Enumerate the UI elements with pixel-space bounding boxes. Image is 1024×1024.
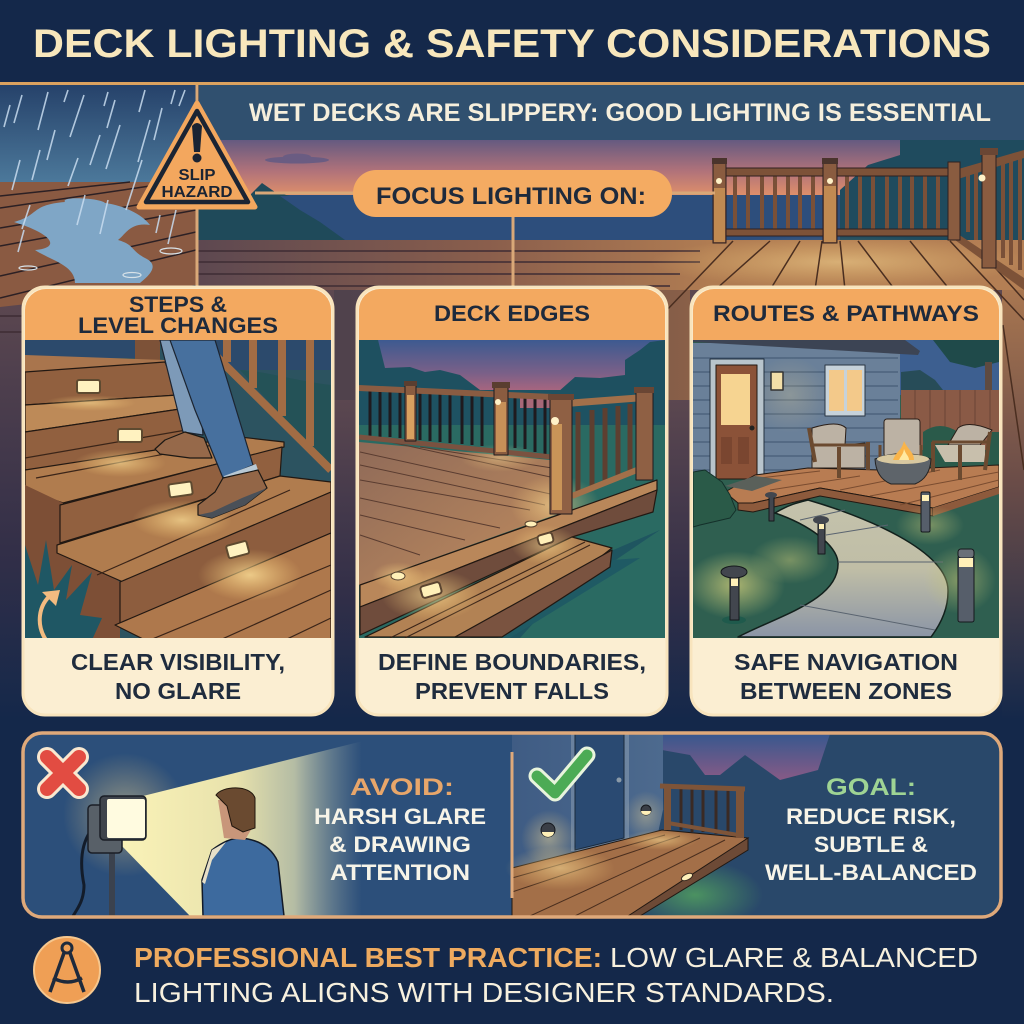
caption: routes [734,649,958,704]
panel: avoid and goal comparison [23,733,1001,930]
icon: slip hazard warning sign [139,103,255,207]
illustration: floodlight glare and person [68,743,356,916]
icon: green check [537,755,587,793]
connector lines [197,85,715,290]
title band [0,0,1024,85]
text: goal: GOAL: [826,774,916,801]
panel header: deck edges [359,289,665,340]
caption: deck edges: PREVENT FALLS [415,678,609,704]
text: professional best practice: LOW GLARE & BALANCED [610,942,978,973]
text: avoid: & DRAWING [329,832,471,857]
text: goal: WELL-BALANCED [765,860,977,885]
panel: steps and level changes [23,287,333,715]
caption: steps: NO GLARE [115,678,241,704]
icon: slip hazard warning sign: SLIP [178,167,216,184]
subtitle banner: WET DECKS ARE SLIPPERY: GOOD LIGHTING IS ESSENTIAL [249,99,991,127]
rain scene with wet deck [0,85,196,307]
panel header: routes [693,289,999,340]
panel header: steps [25,289,331,340]
illustration: lit stairs with walking person [25,340,331,640]
text: avoid: ATTENTION [330,860,470,885]
panel: routes and pathways [685,287,1001,715]
text: avoid [314,774,486,885]
text: professional best practice: LIGHTING ALIGNS WITH DESIGNER STANDARDS. [134,977,834,1008]
caption: steps [71,649,285,704]
background deck scene [0,140,1024,720]
text: avoid: AVOID: [350,774,454,801]
illustration: deck edge with railing [359,340,665,638]
panel header: deck edges: DECK EDGES [434,301,590,326]
text: goal [765,774,977,885]
callout: focus lighting on: FOCUS LIGHTING ON: [376,183,646,210]
panel header: routes: ROUTES & PATHWAYS [713,301,979,326]
panel header: steps: LEVEL CHANGES [78,313,278,338]
text: goal: SUBTLE & [814,832,928,857]
title band: DECK LIGHTING & SAFETY CONSIDERATIONS [33,22,991,66]
caption: steps: CLEAR VISIBILITY, [71,649,285,675]
caption: deck edges: DEFINE BOUNDARIES, [378,649,646,675]
text: goal: REDUCE RISK, [786,804,956,829]
icon: drafting compass badge [34,937,100,1003]
text: professional best practice: PROFESSIONAL BEST PRACTICE: [134,942,602,973]
panel: deck edges [357,287,667,715]
icon: red cross [47,757,79,789]
callout: focus lighting on [353,170,672,217]
panel header: steps: STEPS & [129,292,227,317]
caption: deck edges [378,649,646,704]
caption: routes: BETWEEN ZONES [740,678,952,704]
text: avoid: HARSH GLARE [314,804,486,829]
icon: slip hazard warning sign: HAZARD [162,184,232,201]
subtitle banner [199,85,1024,140]
railing in background scene [712,148,1024,290]
caption: routes: SAFE NAVIGATION [734,649,958,675]
text: professional best practice [134,942,978,1008]
illustration: house, patio and path lights [685,340,999,638]
illustration: balanced deck lighting [509,734,830,916]
